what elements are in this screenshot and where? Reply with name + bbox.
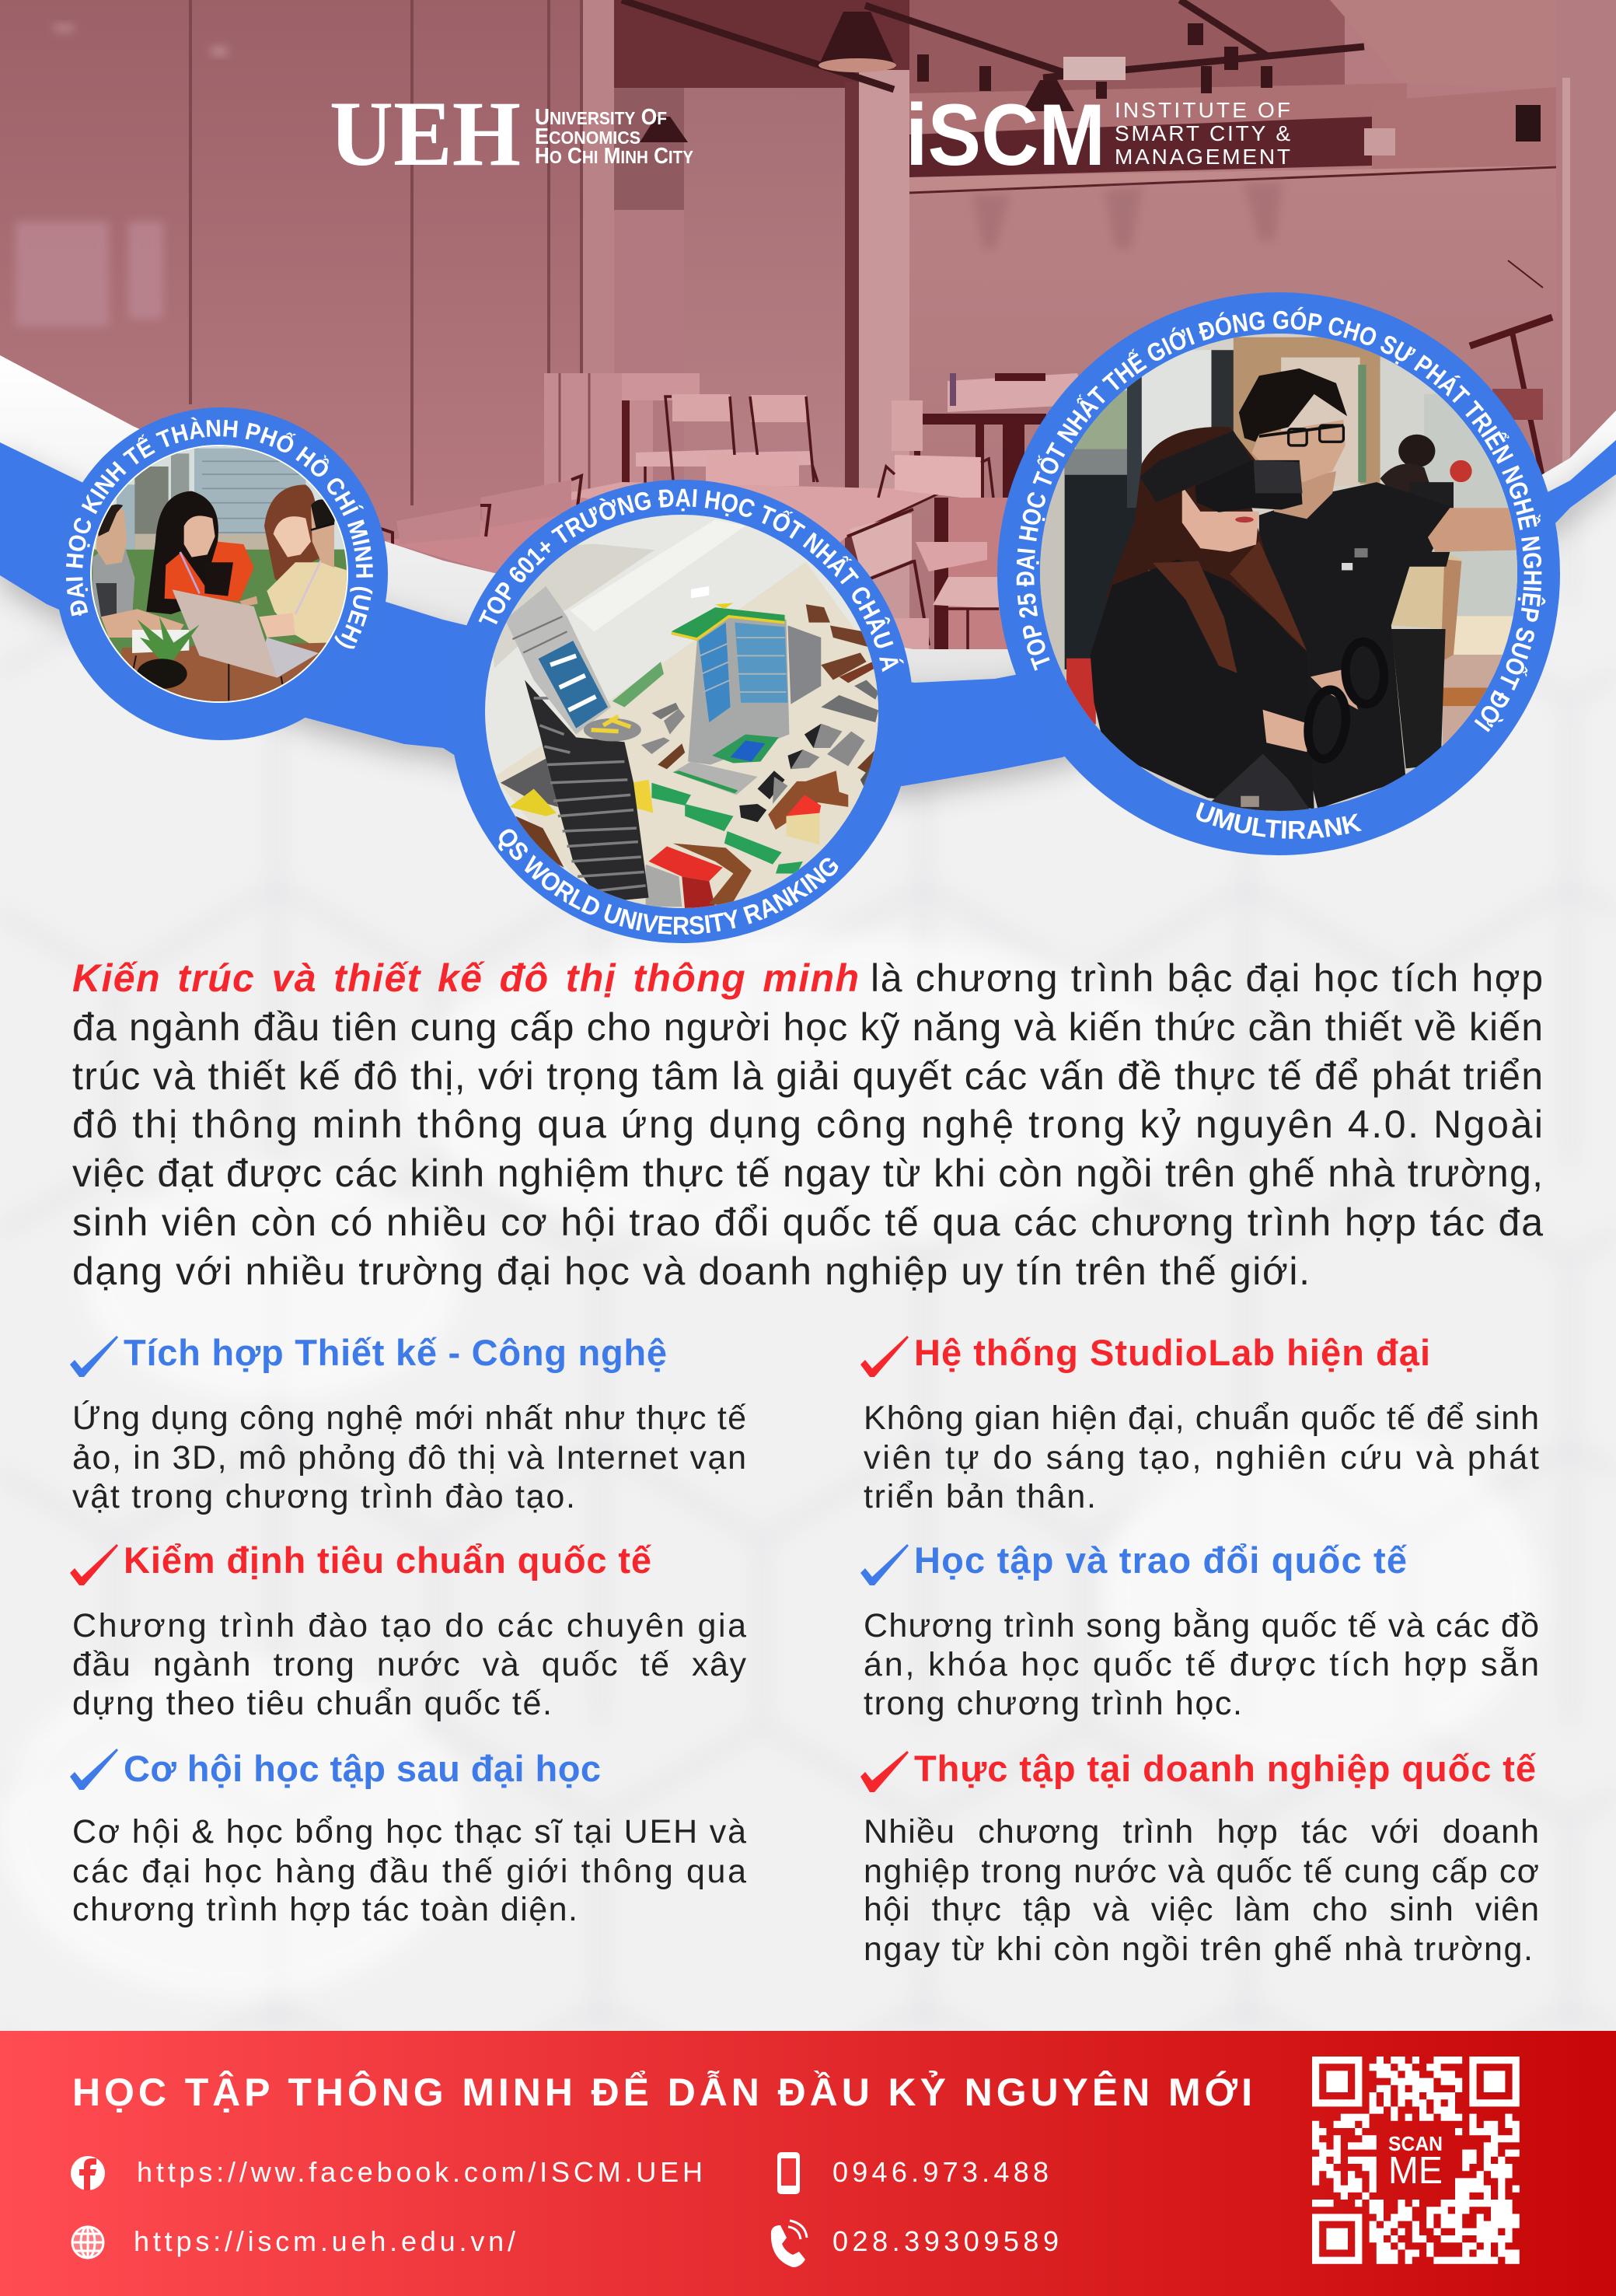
feature: Cơ hội học tập sau đại học: chương trình hợp tác toàn diện. — [72, 1891, 578, 1928]
lectern — [1470, 260, 1552, 498]
intro paragraph: dạng với nhiều trường đại học và doanh nghiệp uy tín trên thế giới. — [72, 1249, 1310, 1293]
hands — [1263, 710, 1311, 752]
logo: iSCM: INSTITUTE OF — [1115, 98, 1290, 122]
logo: iSCM: SMART CITY & — [1115, 121, 1290, 145]
back corridor — [614, 0, 913, 89]
feature: Học tập và trao đổi quốc tế: Học tập và trao đổi quốc tế — [914, 1539, 1408, 1581]
feature: Hệ thống StudioLab hiện đại: triển bản thân. — [864, 1478, 1096, 1515]
main building — [787, 625, 821, 704]
feature: Kiểm định tiêu chuẩn quốc tế: Chương trình đào tạo do các chuyên gia — [72, 1607, 746, 1644]
intro paragraph: đa ngành đầu tiên cung cấp cho người học kỹ năng và kiến thức cần thiết về kiến — [72, 1005, 1543, 1049]
left chairs — [381, 473, 589, 573]
feature: Kiểm định tiêu chuẩn quốc tế: dựng theo tiêu chuẩn quốc tế. — [72, 1685, 552, 1722]
intro paragraph: Kiến trúc và thiết kế đô thị thông minh — [72, 956, 859, 1000]
intro paragraph: là chương trình bậc đại học tích hợp — [871, 956, 1543, 1000]
check icon — [860, 1336, 909, 1377]
circular caption: top: TOP 601+ TRƯỜNG ĐẠI HỌC TỐT NHẤT CHÂU Á — [479, 488, 904, 672]
photo: VR students — [1035, 332, 1524, 816]
check icon — [860, 1544, 909, 1585]
person center — [146, 491, 231, 614]
icon: globe — [72, 2227, 103, 2258]
circular caption: top: TOP 25 ĐẠI HỌC TỐT NHẤT THẾ GIỚI ĐÓNG GÓP CHO SỰ PHÁT TRIỂN NGHỀ NGHIỆP SUỐT ĐỜI — [1017, 306, 1545, 732]
feature: Thực tập tại doanh nghiệp quốc tế: Nhiều chương trình hợp tác với doanh — [864, 1813, 1539, 1850]
facebook link: https://ww.facebook.com/ISCM.UEH — [137, 2156, 703, 2188]
feature: Cơ hội học tập sau đại học — [70, 1748, 746, 1928]
feature: Thực tập tại doanh nghiệp quốc tế: nghiệp trong nước và quốc tế cung cấp cơ — [864, 1853, 1539, 1890]
website link: https://iscm.ueh.edu.vn/ — [134, 2225, 515, 2257]
far blocks — [806, 604, 878, 680]
feature: Cơ hội học tập sau đại học: các đại học hàng đầu thế giới thông qua — [72, 1853, 746, 1890]
intro paragraph: trúc và thiết kế đô thị, với trọng tâm là giải quyết các vấn đề thực tế để phát triển — [72, 1054, 1543, 1098]
check icon — [70, 1336, 118, 1377]
feature: Thực tập tại doanh nghiệp quốc tế: ngay từ khi còn ngồi trên ghế nhà trường. — [864, 1931, 1533, 1968]
badge: U-Multirank — [997, 292, 1560, 855]
feature: Hệ thống StudioLab hiện đại: viên tự do sáng tạo, nghiên cứu và phát — [864, 1439, 1539, 1476]
feature: Thực tập tại doanh nghiệp quốc tế: hội thực tập và việc làm cho sinh viên — [864, 1891, 1539, 1928]
feature: Tích hợp Thiết kế - Công nghệ — [70, 1332, 746, 1515]
bottom red block — [646, 865, 682, 907]
blue swoosh band — [0, 440, 1616, 786]
woman — [1091, 427, 1358, 813]
logo: iSCM: iSCM — [906, 86, 1105, 183]
feature: Hệ thống StudioLab hiện đại: Không gian hiện đại, chuẩn quốc tế để sinh — [864, 1400, 1539, 1437]
skyscraper — [525, 680, 649, 902]
person right — [264, 484, 321, 599]
badge: QS ranking — [454, 480, 912, 943]
photo: lego city — [483, 514, 881, 913]
feature: Học tập và trao đổi quốc tế: trong chương trình học. — [864, 1685, 1242, 1722]
feature: Tích hợp Thiết kế - Công nghệ: ảo, in 3D, mô phỏng đô thị và Internet vạn — [72, 1439, 746, 1476]
hero photo: studio room — [0, 0, 1616, 700]
left blocks — [501, 759, 558, 807]
icon: facebook — [71, 2156, 105, 2190]
footer slogan: HỌC TẬP THÔNG MINH ĐỂ DẪN ĐẦU KỶ NGUYÊN MỚI — [72, 2070, 1252, 2114]
logo: iSCM — [906, 86, 1290, 183]
mobile number: 0946.973.488 — [832, 2156, 1049, 2188]
check icon — [70, 1749, 118, 1790]
check icon — [70, 1544, 118, 1585]
brown cross — [768, 771, 848, 830]
logo: UEH: UEH — [330, 82, 521, 185]
far tables and chairs — [544, 373, 1088, 649]
man — [1239, 369, 1520, 809]
intro paragraph — [72, 956, 1543, 1293]
table — [119, 643, 347, 705]
plant — [138, 617, 200, 663]
feature: Kiểm định tiêu chuẩn quốc tế — [70, 1539, 746, 1722]
icon: handset — [771, 2221, 807, 2267]
white swoosh — [0, 355, 1616, 746]
badge: UEH students — [59, 407, 388, 740]
footer band — [0, 2031, 1616, 2296]
feature: Tích hợp Thiết kế - Công nghệ: vật trong chương trình đào tạo. — [72, 1478, 575, 1515]
check icon — [860, 1751, 909, 1792]
intro paragraph: sinh viên còn có nhiều cơ hội trao đổi quốc tế qua các chương trình hợp tác đa — [72, 1200, 1543, 1244]
VR controllers — [1304, 640, 1387, 761]
photo: students — [88, 446, 350, 705]
icon: mobile phone — [777, 2152, 800, 2194]
logo: UEH — [330, 82, 693, 185]
small houses — [739, 724, 830, 822]
feature: Thực tập tại doanh nghiệp quốc tế: Thực tập tại doanh nghiệp quốc tế — [914, 1748, 1537, 1789]
logo: UEH: UNIVERSITY OF — [535, 105, 667, 130]
feature: Học tập và trao đổi quốc tế — [860, 1539, 1539, 1722]
feature: Cơ hội học tập sau đại học: Cơ hội học tập sau đại học — [124, 1748, 601, 1789]
feature: Học tập và trao đổi quốc tế: án, khóa học quốc tế được tích hợp sẵn — [864, 1646, 1539, 1683]
QR label: SCAN — [1388, 2132, 1443, 2155]
QR label — [1388, 2132, 1443, 2192]
background people — [1380, 435, 1461, 768]
person left — [92, 536, 134, 617]
intro paragraph: đô thị thông minh thông qua ứng dụng công nghệ trong kỷ nguyên 4.0. Ngoài — [72, 1103, 1543, 1146]
intro paragraph: việc đạt được các kinh nghiệm thực tế ngay từ khi còn ngồi trên ghế nhà trường, — [72, 1151, 1543, 1195]
logo: iSCM: MANAGEMENT — [1115, 145, 1290, 169]
QR label: ME — [1388, 2150, 1443, 2192]
city base — [494, 562, 878, 910]
track lights — [622, 0, 1364, 89]
feature: Kiểm định tiêu chuẩn quốc tế: đầu ngành trong nước và quốc tế xây — [72, 1646, 746, 1683]
feature: Học tập và trao đổi quốc tế: Chương trình song bằng quốc tế và các đồ — [864, 1607, 1539, 1644]
landline number: 028.39309589 — [832, 2225, 1059, 2257]
feature: Kiểm định tiêu chuẩn quốc tế: Kiểm định tiêu chuẩn quốc tế — [124, 1539, 652, 1581]
feature: Hệ thống StudioLab hiện đại: Hệ thống StudioLab hiện đại — [914, 1332, 1430, 1373]
feature: Cơ hội học tập sau đại học: Cơ hội & học bổng học thạc sĩ tại UEH và — [72, 1813, 746, 1850]
circular caption: bottom: QS WORLD UNIVERSITY RANKING — [498, 829, 838, 935]
feature: Hệ thống StudioLab hiện đại — [860, 1332, 1539, 1515]
QR code — [1312, 2057, 1520, 2264]
feature: Thực tập tại doanh nghiệp quốc tế — [860, 1748, 1539, 1968]
circular caption: ĐẠI HỌC KINH TẾ THÀNH PHỐ HỒ CHÍ MINH (UEH) — [65, 417, 373, 648]
circular caption: bottom: UMULTIRANK — [1196, 802, 1362, 839]
logo: UEH: ECONOMICS — [535, 124, 640, 149]
ceiling — [909, 0, 1345, 101]
feature: Tích hợp Thiết kế - Công nghệ: Ứng dụng công nghệ mới nhất như thực tế — [72, 1400, 746, 1437]
logo: UEH: HO CHI MINH CITY — [535, 144, 693, 169]
feature: Tích hợp Thiết kế - Công nghệ: Tích hợp Thiết kế - Công nghệ — [124, 1332, 667, 1373]
green strips — [651, 783, 803, 873]
laptop — [262, 638, 319, 678]
